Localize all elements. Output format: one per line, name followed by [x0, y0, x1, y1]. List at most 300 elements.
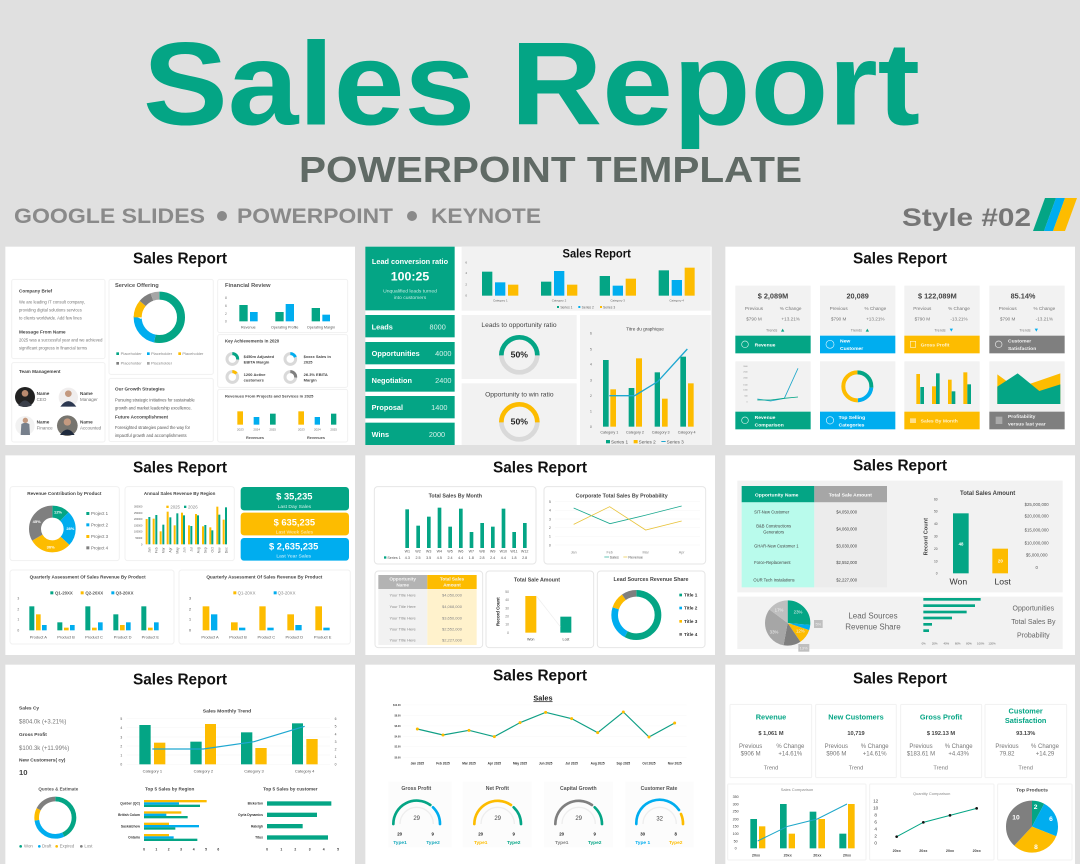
card: customer satisfaction: % Change — [1031, 744, 1060, 750]
bar chart: $15,000,000 — [1025, 528, 1049, 533]
panel: sales line chart: Feb 2025 — [436, 761, 450, 765]
panel: sales monthly trend: 1 — [335, 755, 337, 759]
panel: service offering: Service Offering — [115, 283, 159, 289]
KPI: last day sales: $ 35,235 — [276, 491, 312, 501]
panel: lead sources and probability: 17% — [775, 607, 783, 612]
panel: KPI list: $804.0k (+3.21%) — [19, 720, 66, 726]
card: gross profit: Gross Profit — [920, 712, 963, 721]
panel: lead sources share — [597, 571, 705, 648]
gauge card: customer rate — [625, 782, 694, 847]
panel: quantity comparison: 8 — [874, 813, 877, 818]
panel: revenues from projects: Revenues — [307, 436, 325, 440]
card: new customers: New Customers — [828, 712, 884, 721]
panel: corporate total sales: Apr — [679, 550, 685, 554]
bar chart: 20 — [998, 559, 1003, 564]
panel: total sales by month: 4.4 — [458, 556, 463, 560]
card: customer satisfaction: Trend — [1018, 766, 1033, 772]
panel: sales comparison: 150 — [733, 825, 739, 829]
panel: financial review: 2 — [225, 312, 227, 316]
small donut gauges — [227, 354, 296, 382]
panel: team management: Name — [80, 391, 93, 396]
icon: person finance — [15, 416, 35, 435]
funnel list: 2400 — [435, 376, 451, 385]
bar chart — [916, 372, 971, 404]
icon: person CEO — [15, 387, 35, 407]
panel: revenues from projects: Revenues From Projects and Services in 2025 — [225, 393, 314, 398]
bar chart — [525, 596, 571, 633]
card: sales by month — [904, 361, 980, 429]
panel: sales comparison: 20xx — [813, 854, 821, 858]
panel: sales line chart: $10.00 — [393, 704, 401, 707]
panel: key achievements — [218, 335, 348, 387]
panel: quantity comparison: 20xx — [946, 849, 954, 853]
bar chart — [405, 508, 527, 548]
panel: total sales by month: W10 — [500, 549, 507, 553]
panel: sales line chart: $8.00 — [394, 714, 401, 717]
panel: corporate total sales: Mar — [643, 550, 650, 554]
panel: total sale amount: Lost — [563, 637, 569, 641]
card: customer satisfaction: $790 M — [1000, 316, 1016, 321]
legend: Placeholder — [182, 351, 204, 356]
panel: top sales by region — [118, 786, 219, 851]
card: new customer: +13.21% — [866, 316, 885, 321]
panel: corporate total sales: 0 — [549, 543, 551, 547]
panel: total sale amount: 0 — [507, 631, 509, 635]
panel: revenue contribution donut: Project 4 — [91, 545, 109, 550]
panel: combo chart: Category 3 — [652, 431, 670, 435]
panel: sales line chart: Jun 2025 — [539, 761, 553, 765]
panel: annual sales by region: 250000 — [134, 512, 143, 515]
panel: top products: Top Products — [1016, 788, 1048, 794]
panel: key achievements: 2025 — [304, 360, 313, 365]
panel: growth strategies — [109, 378, 213, 442]
panel: quantity comparison — [870, 784, 994, 860]
panel: total sales by month: 3.5 — [426, 556, 431, 560]
panel: total sales by month: W9 — [490, 549, 495, 553]
card: customer satisfaction: Customer — [1009, 707, 1043, 716]
panel: quarterly assessment two series: Product A — [201, 634, 219, 639]
panel: quarterly assessment three series: Product E — [142, 634, 159, 639]
panel: revenue contribution donut: Project 3 — [91, 534, 109, 539]
panel: opportunity table: Your Title Here — [390, 627, 417, 632]
panel: category bar chart: Series 3 — [603, 305, 615, 309]
panel: quotes and estimate — [19, 786, 93, 849]
card: revenue: $ 2,089M — [758, 292, 788, 301]
panel: lead sources share: Title 2 — [684, 606, 698, 611]
bar chart: Lost — [994, 577, 1011, 587]
bar chart: Total Sales Amount — [960, 491, 1015, 497]
card: gross profit — [901, 704, 982, 778]
card: customer satisfaction: % Change — [1033, 306, 1056, 311]
pie chart — [1019, 814, 1045, 840]
panel: opportunity table: Amount — [443, 583, 461, 588]
card: gross profit: Previous — [913, 306, 932, 311]
panel: quarterly assessment three series: Q3-20XX — [116, 590, 134, 595]
panel: combo chart — [580, 315, 711, 445]
card: revenue: Revenue — [755, 342, 776, 348]
panel: total sales by month: 2.4 — [490, 556, 495, 560]
panel: total sale amount: 20 — [505, 614, 509, 618]
slide 9 heading: Sales Report — [853, 671, 948, 688]
card: new customer: New — [840, 339, 850, 345]
card: customer satisfaction: Trends — [1019, 329, 1031, 333]
panel: lead sources share: Title 3 — [684, 619, 698, 624]
slide 5 heading: Sales Report — [493, 460, 588, 477]
panel: sales monthly trend: Sales Monthly Trend — [203, 709, 251, 715]
panel: combo chart: Series 3 — [667, 439, 684, 444]
panel: company brief: Company Brief — [19, 289, 53, 294]
panel: quarterly assessment two series — [179, 570, 350, 644]
panel: lead sources and probability: 40% — [943, 642, 950, 646]
gauge card: net profit: Type2 — [507, 840, 521, 846]
funnel list: 8000 — [430, 322, 446, 331]
panel: quantity comparison: 4 — [874, 827, 877, 832]
bar chart — [239, 304, 330, 321]
gauge card: gross profit: Type2 — [426, 840, 440, 846]
panel: corporate total sales: Jan — [571, 550, 577, 554]
panel: quarterly assessment three series: Product D — [114, 634, 132, 639]
gauge card: capital growth: 29 — [575, 816, 583, 822]
panel: team management: Accounted — [80, 426, 102, 431]
panel: sales monthly trend: 3 — [120, 735, 122, 739]
panel: sales comparison: 20xx — [752, 854, 760, 858]
panel: revenue contribution donut: 12% — [54, 510, 62, 515]
panel: sales comparison: 20xx — [843, 854, 851, 858]
panel: sales comparison: Sales Comparison — [781, 787, 813, 792]
panel: top sales by region: 0 — [143, 847, 145, 851]
funnel list: Wins — [372, 430, 389, 439]
panel: financial review: 6 — [225, 304, 227, 308]
card: gross profit: Trend — [933, 766, 948, 772]
panel: category bar chart: 4 — [465, 271, 467, 275]
panel: total sales by month: Series 1 — [387, 556, 401, 560]
bar chart: 60 — [934, 497, 938, 501]
funnel list: 1400 — [431, 403, 447, 412]
gauge card: net profit: Net Profit — [486, 786, 509, 792]
panel: financial review: 8 — [225, 296, 227, 300]
panel: sales line chart — [393, 693, 687, 765]
panel: quarterly assessment three series: 1 — [17, 618, 19, 622]
panel: lead sources and probability: 80% — [966, 642, 972, 646]
panel: sales monthly trend: 0 — [335, 763, 337, 767]
panel: lead conversion ratio: Unqualified leads turned — [383, 288, 437, 294]
gauge card: net profit: 29 — [494, 816, 502, 822]
panel: top products: 10 — [1012, 815, 1020, 822]
panel: sales comparison: 50 — [734, 839, 738, 843]
panel: revenue contribution donut: Project 2 — [91, 522, 109, 527]
panel: lead sources and probability: 23% — [794, 609, 802, 614]
panel: annual sales by region: Nov — [217, 547, 221, 553]
panel: revenues from projects: 2023 — [298, 428, 305, 432]
card: revenue comparison: 2500 — [743, 372, 749, 374]
card: gross profit: -13.21% — [950, 316, 968, 321]
slide 6 heading: Sales Report — [853, 458, 948, 475]
card: sales by month: Sales By Month — [921, 418, 958, 424]
panel: quarterly assessment two series: 1 — [189, 618, 191, 622]
panel: top sales by region: British Colum — [118, 813, 140, 817]
gauge card: net profit: 9 — [512, 832, 515, 837]
panel: lead sources and probability: Revenue Share — [845, 622, 901, 631]
card: gross profit: % Change — [948, 306, 970, 311]
panel: category bar chart: Series 1 — [560, 305, 573, 309]
platform list: KEYNOTE — [431, 204, 541, 228]
panel: service offering — [109, 279, 213, 374]
card: customer satisfaction: Satisfaction — [1005, 716, 1047, 725]
panel: quotes and estimate: Quotes & Estimate — [38, 786, 79, 791]
panel: lead sources share: Title 1 — [684, 593, 698, 598]
panel: annual sales by region: 0 — [141, 543, 143, 546]
panel: lead sources and probability: 0% — [922, 642, 926, 646]
panel: sales monthly trend — [120, 709, 337, 773]
panel: financial review: Revenue — [241, 326, 256, 330]
panel: quotes and estimate: Draft — [42, 844, 52, 849]
panel: sales comparison: 100 — [733, 832, 739, 836]
panel: team management: Name — [37, 420, 50, 425]
panel: total sales by month: 4.5 — [437, 556, 442, 560]
panel: lead conversion ratio — [365, 247, 455, 310]
panel: sales monthly trend: Category 1 — [143, 768, 163, 773]
panel: top sales by customer: 0 — [266, 847, 268, 851]
panel: quarterly assessment two series: Product E — [314, 634, 332, 639]
panel: growth strategies: Our Growth Strategies — [115, 386, 165, 391]
panel: corporate total sales: 2 — [549, 526, 551, 530]
table: $4,060,000 — [836, 526, 858, 531]
panel: combo chart: Category 1 — [600, 431, 618, 435]
panel: combo chart: Category 2 — [626, 431, 644, 435]
panel: lead sources and probability: 20% — [932, 642, 938, 646]
slide 6: opportunity table and pie — [725, 455, 1075, 655]
panel: company brief: to clients worldwide. Add few lines — [19, 316, 82, 321]
panel: sales monthly trend: 4 — [120, 726, 122, 730]
panel: total sales by month: W7 — [469, 549, 474, 553]
panel: quarterly assessment two series: 2 — [189, 607, 191, 611]
panel: opportunity to win ratio: Opportunity to win ratio — [485, 392, 554, 399]
panel: combo chart: 5 — [590, 347, 592, 351]
panel: combo chart: 0 — [590, 425, 592, 429]
card: customer satisfaction: 93.13% — [1016, 731, 1035, 737]
bar chart — [144, 800, 207, 841]
panel: annual sales by region: 2025 — [170, 505, 181, 510]
gauge card: customer rate: 32 — [656, 817, 664, 823]
panel: sales line chart: Mar 2025 — [462, 761, 476, 765]
panel: annual sales by region: 150000 — [134, 524, 143, 527]
line series — [609, 349, 687, 396]
panel: company brief: We are leading IT consult company, — [19, 300, 85, 305]
gauge card: gross profit: 29 — [413, 816, 421, 822]
gauge card: capital growth: Type1 — [555, 840, 569, 846]
panel: total sale amount: 50 — [505, 590, 509, 594]
panel: financial review: 0 — [225, 320, 227, 324]
panel: sales comparison: 200 — [733, 817, 739, 821]
panel: total sale amount: 40 — [505, 598, 509, 602]
panel: sales comparison: 300 — [733, 802, 739, 806]
panel: growth strategies: Future Accomplishment — [115, 414, 169, 419]
panel: top products: 2 — [1034, 804, 1038, 811]
callout labels — [798, 620, 823, 652]
panel: annual sales by region: Dec — [224, 547, 228, 553]
panel: total sale amount: Record Count — [495, 597, 500, 626]
panel: lead sources and probability: Probability — [1017, 632, 1050, 639]
icon: tri-colour stripes — [1033, 198, 1077, 231]
panel: top sales by region: 3 — [180, 847, 182, 851]
funnel list: Proposal — [372, 403, 403, 412]
panel: lead sources and probability: Total Sales By — [1011, 619, 1056, 626]
panel: quarterly assessment three series: 0 — [17, 629, 19, 633]
panel: sales comparison: 20xx — [784, 854, 792, 858]
card: gross profit: Previous — [909, 744, 933, 750]
panel: company brief: providing digital solutions services — [19, 308, 82, 313]
card: gross profit: $790 M — [915, 316, 930, 321]
donut chart — [615, 593, 658, 637]
platform list: GOOGLE SLIDES — [14, 204, 205, 228]
panel: total sales by month: W2 — [415, 549, 421, 553]
panel: category bar chart: Series 2 — [582, 305, 594, 309]
panel: opportunity to win ratio: 50% — [511, 416, 528, 426]
panel: corporate total sales: 3 — [549, 517, 551, 521]
card: revenue — [730, 704, 812, 778]
panel: total sales by month: 4.4 — [501, 556, 506, 560]
panel: top sales by region: Québer (QC) — [120, 802, 140, 806]
panel: sales monthly trend: 3 — [335, 740, 337, 744]
card: gross profit: $ 122,089M — [918, 292, 957, 301]
icon: person manager — [59, 388, 78, 407]
card: revenue comparison: 1000 — [743, 390, 749, 392]
panel: sales line chart: May 2025 — [513, 761, 527, 765]
panel: lead sources share: Lead Sources Revenue Share — [614, 577, 688, 583]
panel: top products: 6 — [1049, 816, 1053, 823]
panel: annual sales by region: Jul — [189, 547, 193, 552]
panel: lead sources and probability: 12% — [796, 628, 805, 633]
funnel list: Opportunities — [372, 349, 420, 358]
panel: top sales by region: 1 — [155, 847, 157, 851]
panel: lead sources and probability: 120% — [988, 642, 996, 646]
card: revenue comparison: 3000 — [743, 366, 749, 368]
combo chart — [750, 804, 855, 848]
panel: sales line chart: Oct 2025 — [642, 761, 656, 765]
panel: top sales by region: 5 — [205, 847, 207, 851]
panel: opportunity table: $2,552,000 — [442, 627, 463, 632]
panel: revenues from projects: 2025 — [269, 428, 276, 432]
bar chart — [29, 606, 159, 630]
panel: annual sales by region: May — [175, 547, 179, 554]
funnel list: 2000 — [429, 430, 445, 439]
panel: total sales by month: W1 — [405, 549, 410, 553]
card: top selling categories — [820, 361, 895, 429]
panel: corporate total sales: 5 — [549, 500, 551, 504]
panel: total sales by month: 1.8 — [511, 556, 517, 560]
card: new customer: Previous — [830, 306, 848, 311]
panel: quantity comparison: 20xx — [893, 849, 901, 853]
table — [742, 486, 887, 587]
panel: key achievements: 26.3% EBITA — [304, 372, 328, 377]
panel: opportunity table: $4,068,000 — [442, 604, 463, 609]
panel: leads to opportunity ratio — [462, 315, 577, 379]
panel: company brief: significant progress in financial terms — [19, 346, 87, 351]
panel: annual sales by region: Feb — [154, 547, 158, 553]
panel: revenue contribution donut: 30% — [47, 544, 55, 549]
panel: sales line chart: Jan 2025 — [411, 761, 424, 765]
panel: annual sales by region: 50000 — [135, 537, 143, 540]
panel: opportunity table: Name — [396, 583, 409, 588]
panel: revenues from projects: 2024 — [314, 428, 321, 432]
gauge card: customer rate: Customer Rate — [641, 786, 677, 792]
bar chart: $20,000,000 — [1025, 514, 1049, 519]
panel: quarterly assessment two series: Product C — [257, 634, 275, 639]
panel: opportunity to win ratio — [462, 383, 577, 445]
panel: corporate total sales: Feb — [607, 550, 613, 554]
card: revenue: % Change — [776, 744, 805, 750]
panel: lead conversion ratio: 100:25 — [391, 270, 429, 284]
panel: quarterly assessment two series: 0 — [189, 629, 191, 633]
panel: annual sales by region: Sep — [203, 547, 207, 553]
bar chart — [923, 491, 1049, 587]
panel: total sales by month: 4.3 — [405, 556, 410, 560]
gauge card: gross profit — [388, 782, 452, 847]
panel: sales line chart: Apr 2025 — [488, 761, 501, 765]
legend — [116, 351, 204, 366]
combo chart — [139, 723, 318, 764]
card: profitability — [989, 361, 1065, 429]
icon: person accountant — [57, 415, 78, 436]
KPI: last day sales — [241, 487, 349, 510]
gauge card: capital growth: Capital Growth — [560, 786, 597, 792]
bar chart: 10 — [934, 559, 938, 563]
card: customer satisfaction: Previous — [999, 306, 1017, 311]
legend: Placeholder — [121, 361, 142, 366]
panel: company brief: 2025 was a successful year and we achieved — [19, 338, 103, 343]
table: SIT-New Customer — [754, 509, 790, 514]
panel: top sales by customer: 3 — [309, 847, 311, 851]
card: revenue comparison: Comparison — [755, 422, 784, 428]
card: customer satisfaction: +14.29 — [1036, 752, 1055, 758]
panel: lead sources and probability: 100% — [977, 642, 985, 646]
gauge card: capital growth — [544, 782, 613, 847]
panel: total sale amount: Total Sale Amount — [514, 578, 560, 584]
panel: annual sales by region: Aug — [196, 547, 200, 553]
panel: opportunity table: Your Title Here — [390, 638, 417, 643]
panel: sales monthly trend: 4 — [335, 732, 337, 736]
card: new customers: % Change — [861, 744, 889, 750]
panel: KPI list: New Customers( cy) — [19, 758, 66, 764]
panel: annual sales by region: Annual Sales Revenue By Region — [144, 491, 216, 496]
gauge card: gross profit: Gross Profit — [401, 786, 432, 792]
gauge — [501, 404, 537, 439]
panel: top sales by region: Top 5 Sales by Region — [145, 786, 194, 791]
panel: revenues from projects: Revenues — [246, 436, 264, 440]
panel: top sales by customer: 2 — [294, 847, 296, 851]
panel: top sales by region: Saskatchew — [121, 824, 140, 828]
panel: corporate total sales — [544, 487, 706, 564]
card: customer satisfaction — [989, 286, 1065, 353]
card: revenue comparison: 500 — [744, 396, 749, 398]
panel: total sales by month: W11 — [510, 549, 518, 553]
bar chart: 0 — [936, 572, 938, 576]
slide 7: monthly trend — [5, 665, 355, 864]
bar chart: 0 — [1035, 565, 1038, 570]
panel: top products — [998, 784, 1072, 860]
panel: growth strategies: Pursuing strategic initiatives for sustainable — [115, 397, 195, 402]
card: revenue: % Change — [780, 306, 802, 311]
panel: revenue contribution donut: 45% — [33, 519, 41, 524]
table: GHAR-New Customer 1 — [754, 543, 799, 548]
panel: quarterly assessment three series: Product B — [57, 634, 75, 639]
panel: combo chart: 4 — [590, 363, 592, 367]
callout labels: 13% — [800, 645, 808, 650]
panel: quarterly assessment three series: Product A — [30, 634, 47, 639]
card: gross profit: $183.61 M — [907, 752, 935, 758]
card: revenue: Previous — [745, 306, 764, 311]
panel: sales comparison — [728, 784, 866, 860]
